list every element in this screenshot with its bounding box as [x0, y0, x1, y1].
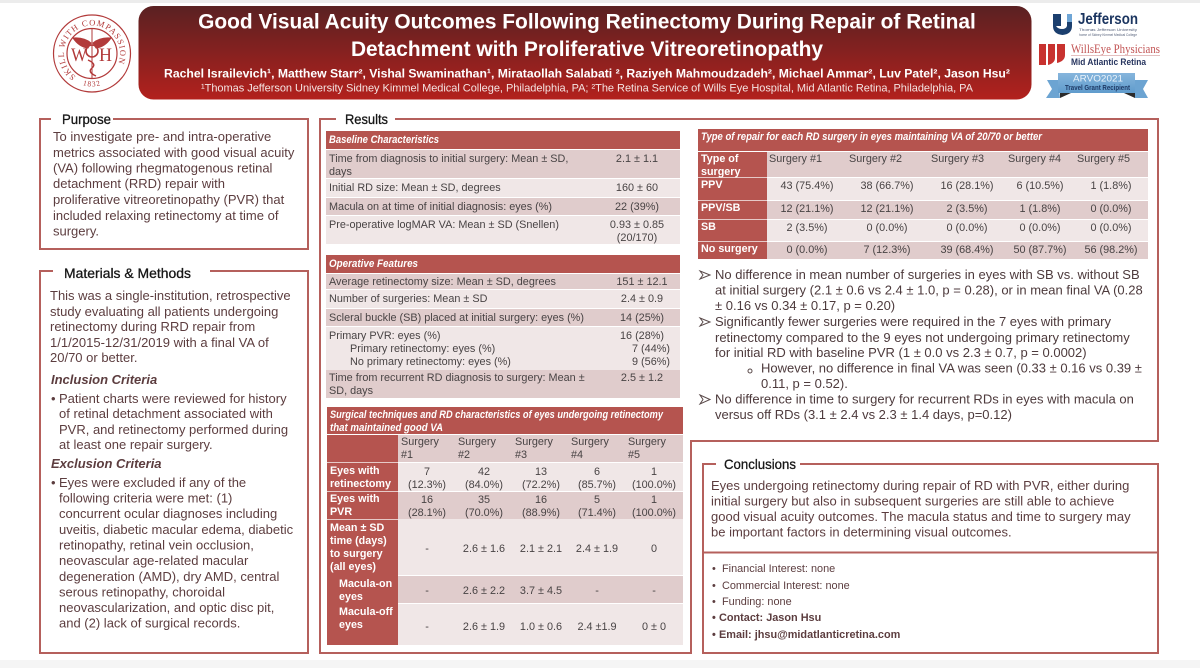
table: surgical techniques: (71.4%) — [578, 507, 616, 519]
table: baseline characteristics: 22 (39%) — [615, 201, 659, 213]
table: baseline characteristics — [326, 131, 680, 244]
table: operative features: Number of surgeries: Mean ± SD — [329, 293, 488, 305]
affiliations: ¹Thomas Jefferson University Sidney Kimmel Medical College, Philadelphia, PA; ²The Retina Service of Wills Eye Hospital, Mid Atlantic Retina, Philadelphia, PA — [201, 82, 974, 94]
table: type of repair: 43 (75.4%) — [780, 180, 834, 192]
table: surgical techniques: 13 — [535, 466, 547, 478]
disclosures: • — [712, 629, 716, 641]
table: baseline characteristics: days — [329, 166, 352, 178]
conclusions text: be important factors in determining visual outcomes. — [711, 524, 1012, 540]
table: baseline characteristics: 160 ± 60 — [616, 182, 658, 194]
logo: college seal: 1832 — [83, 80, 100, 86]
table: surgical techniques: 0 — [651, 543, 657, 555]
table: type of repair: 0 (0.0%) — [947, 222, 987, 234]
table: surgical techniques: #4 — [571, 449, 583, 461]
panel: conclusions — [703, 456, 1158, 653]
table: surgical techniques: Surgery — [515, 436, 554, 448]
logo: Jefferson: Jefferson — [1078, 11, 1138, 28]
table: surgical techniques: 35 — [478, 494, 490, 506]
table: type of repair: 1 (1.8%) — [1091, 180, 1131, 192]
table: surgical techniques: Macula-on — [339, 578, 392, 590]
table: surgical techniques: Eyes with — [330, 465, 380, 477]
results findings list: ± 0.16 vs 0.34 ± 0.17, p = 0.20) — [715, 298, 895, 313]
table: baseline characteristics: 0.93 ± 0.85 — [610, 219, 664, 231]
methods text: study evaluating all patients undergoing — [50, 304, 278, 319]
table: surgical techniques: 42 — [478, 466, 490, 478]
table: surgical techniques: PVR — [330, 506, 352, 518]
table: operative features: 2.4 ± 0.9 — [621, 293, 663, 305]
panel: purpose — [40, 111, 308, 249]
title: Detachment with Proliferative Vitreoretinopathy — [351, 38, 823, 61]
table: operative features: Primary PVR: eyes (%) — [329, 330, 440, 342]
table: type of repair: surgery — [701, 166, 740, 178]
table: baseline characteristics: Time from diagnosis to initial surgery: Mean ± SD, — [329, 153, 568, 165]
table: type of repair: 12 (21.1%) — [780, 203, 834, 215]
panel: results — [320, 111, 1158, 653]
authors: Rachel Israilevich¹, Matthew Starr², Vishal Swaminathan¹, Mirataollah Salabati ², Raziyeh Mahmoudzadeh², Michael Ammar², Luv Patel², Jason Hsu² — [164, 66, 1010, 80]
exclusion criteria: Eyes were excluded if any of the — [59, 475, 246, 490]
table: type of repair: 0 (0.0%) — [1020, 222, 1060, 234]
table: surgical techniques: (72.2%) — [522, 479, 560, 491]
exclusion criteria: neovascularization, and optic disc pit, — [59, 600, 274, 615]
results findings list: No difference in mean number of surgeries in eyes with SB vs. without SB — [715, 267, 1140, 282]
badge: ARVO travel grant: ARVO2021 — [1073, 74, 1123, 84]
table: operative features: 151 ± 12.1 — [616, 276, 668, 288]
table: baseline characteristics: Initial RD size: Mean ± SD, degrees — [329, 182, 501, 194]
table: surgical techniques: Surgical techniques and RD characteristics of eyes undergoing retinectomy — [330, 409, 664, 421]
table: type of repair: 12 (21.1%) — [860, 203, 914, 215]
heading: conclusions: Conclusions — [724, 456, 796, 472]
table: surgical techniques: (all eyes) — [330, 561, 376, 573]
table: operative features: Operative Features — [329, 258, 418, 270]
conclusions text: initial surgery but also in subsequent surgeries are still able to achieve — [711, 494, 1114, 508]
logo: college seal: W — [71, 45, 87, 66]
table: type of repair: Surgery #2 — [849, 153, 902, 165]
table: surgical techniques: (28.1%) — [408, 507, 446, 519]
table: operative features: 2.5 ± 1.2 — [621, 372, 663, 384]
exclusion criteria — [51, 456, 294, 630]
table: type of repair: 0 (0.0%) — [1091, 222, 1131, 234]
table: surgical techniques: 7 — [424, 466, 430, 478]
table: surgical techniques: to surgery — [330, 548, 383, 560]
inclusion criteria: at least one repair surgery. — [59, 437, 213, 452]
table: surgical techniques: 2.1 ± 2.1 — [520, 543, 562, 555]
table: type of repair: 2 (3.5%) — [787, 222, 827, 234]
methods text: 1/1/2015-12/31/2019 with a final VA of — [50, 335, 269, 350]
inclusion criteria: Patient charts were reviewed for history — [59, 391, 287, 406]
table: surgical techniques — [327, 407, 683, 645]
table: baseline characteristics: (20/170) — [617, 232, 657, 244]
results findings list — [700, 267, 1143, 422]
table: type of repair: 0 (0.0%) — [787, 244, 827, 256]
inclusion criteria: Inclusion Criteria — [51, 372, 157, 387]
table: type of repair: 50 (87.7%) — [1013, 244, 1067, 256]
results findings list: for initial RD with baseline PVR (1 ± 0.0 vs 2.3 ± 0.7, p = 0.0002) — [715, 345, 1087, 360]
results findings list: However, no difference in final VA was seen (0.33 ± 0.16 vs 0.39 ± — [761, 360, 1142, 376]
table: surgical techniques: that maintained good VA — [330, 422, 443, 434]
inclusion criteria — [51, 372, 288, 452]
purpose text: surgery. — [53, 224, 99, 238]
table: surgical techniques: - — [652, 585, 656, 597]
table: surgical techniques: 1 — [651, 494, 657, 506]
inclusion criteria: PVR, and retinectomy performed during — [59, 422, 288, 437]
title: Good Visual Acuity Outcomes Following Retinectomy During Repair of Retinal — [198, 11, 976, 34]
table: surgical techniques: (12.3%) — [408, 479, 446, 491]
table: surgical techniques: Surgery — [628, 436, 667, 448]
table: baseline characteristics: 2.1 ± 1.1 — [616, 153, 658, 165]
badge: ARVO travel grant: Travel Grant Recipient — [1065, 85, 1131, 92]
logo: Wills Eye Physicians: WillsEye Physicians — [1071, 42, 1160, 56]
exclusion criteria: Exclusion Criteria — [51, 456, 162, 471]
table: type of repair: Type of repair for each RD surgery in eyes maintaining VA of 20/70 or better — [701, 131, 1043, 143]
table: surgical techniques: 0 ± 0 — [642, 621, 666, 633]
table: baseline characteristics: Baseline Characteristics — [329, 134, 439, 146]
table: surgical techniques: #1 — [401, 449, 413, 461]
table: surgical techniques: Surgery — [458, 436, 497, 448]
table: surgical techniques: Surgery — [571, 436, 610, 448]
methods text: retinectomy during RRD repair from — [50, 319, 255, 334]
badge: ARVO travel grant — [1046, 73, 1148, 98]
disclosures: Funding: none — [722, 596, 792, 608]
table: surgical techniques: eyes — [339, 619, 363, 631]
table: surgical techniques: 5 — [594, 494, 600, 506]
table: type of repair: Surgery #3 — [931, 153, 984, 165]
table: type of repair: Surgery #5 — [1077, 153, 1130, 165]
methods text — [50, 288, 291, 365]
table: type of repair — [698, 129, 1148, 259]
table: surgical techniques: (100.0%) — [632, 507, 676, 519]
table: surgical techniques: #2 — [458, 449, 470, 461]
table: surgical techniques: Eyes with — [330, 493, 380, 505]
methods text: 20/70 or better. — [50, 350, 137, 365]
table: operative features — [326, 255, 680, 398]
heading: materials and methods: Materials & Methods — [64, 265, 191, 281]
table: type of repair: PPV — [701, 179, 723, 191]
purpose text: proliferative vitreoretinopathy (PVR) that — [53, 192, 285, 207]
table: surgical techniques: (88.9%) — [522, 507, 560, 519]
table: surgical techniques: (85.7%) — [578, 479, 616, 491]
exclusion criteria: degeneration (AMD), dry AMD, central — [59, 569, 279, 584]
exclusion criteria: uveitis, diabetic macular edema, diabetic — [59, 522, 294, 537]
table: surgical techniques: Surgery — [401, 436, 440, 448]
table: operative features: No primary retinectomy: eyes (%) — [350, 356, 511, 368]
exclusion criteria: retinopathy, retinal vein occlusion, — [59, 538, 254, 552]
table: surgical techniques: - — [425, 585, 429, 597]
table: surgical techniques: 1 — [651, 466, 657, 478]
table: type of repair: Surgery #1 — [769, 153, 822, 165]
logo: Wills Eye Physicians: Mid Atlantic Retina — [1071, 56, 1147, 67]
logo: college seal: SKILL WITH COMPASSION — [58, 20, 126, 80]
purpose text: To investigate pre- and intra-operative — [53, 129, 271, 144]
results findings list: No difference in time to surgery for recurrent RDs in eyes with macula on — [715, 392, 1134, 406]
table: surgical techniques: - — [425, 621, 429, 633]
table: type of repair: 39 (68.4%) — [940, 244, 994, 256]
logo: Jefferson: home of Sidney Kimmel Medical College — [1079, 33, 1137, 37]
results findings list: versus off RDs (3.1 ± 2.4 vs 2.3 ± 1.4 days, p=0.12) — [715, 407, 1012, 422]
table: operative features: 9 (56%) — [632, 356, 670, 368]
heading: results: Results — [345, 111, 388, 127]
table: operative features: 14 (25%) — [620, 312, 664, 324]
disclosures — [712, 563, 901, 641]
results findings list: Significantly fewer surgeries were required in the 7 eyes with primary — [715, 314, 1111, 329]
table: operative features: 7 (44%) — [632, 343, 670, 355]
results findings list: at initial surgery (2.1 ± 0.6 vs 2.4 ± 1.0, p = 0.28), or in mean final VA (0.28 — [715, 282, 1143, 298]
results findings list: 0.11, p = 0.52). — [761, 376, 848, 391]
exclusion criteria: neovascular age-related macular — [59, 553, 249, 568]
disclosures: Email: jhsu@midatlanticretina.com — [719, 629, 901, 641]
table: surgical techniques: 2.4 ±1.9 — [577, 621, 617, 633]
table: surgical techniques: #3 — [515, 449, 527, 461]
table: operative features: Average retinectomy size: Mean ± SD, degrees — [329, 276, 557, 288]
logo: Jefferson — [1053, 11, 1138, 37]
table: type of repair: 6 (10.5%) — [1016, 180, 1064, 192]
inclusion criteria: of retinal detachment associated with — [59, 406, 273, 421]
methods text: This was a single-institution, retrospective — [50, 288, 291, 303]
table: type of repair: SB — [701, 221, 716, 233]
panel: materials and methods — [40, 265, 308, 653]
title — [198, 11, 976, 61]
exclusion criteria: concurrent ocular diagnoses including — [59, 506, 277, 521]
table: type of repair: 1 (1.8%) — [1020, 203, 1060, 215]
table: surgical techniques: (70.0%) — [465, 507, 503, 519]
table: surgical techniques: 16 — [535, 494, 547, 506]
table: type of repair: 16 (28.1%) — [940, 180, 994, 192]
inclusion criteria: • — [51, 391, 56, 406]
conclusions text: good visual acuity outcomes. The macula status and time to surgery may — [711, 509, 1131, 524]
table: surgical techniques: retinectomy — [330, 478, 391, 490]
table: surgical techniques: 6 — [594, 466, 600, 478]
table: surgical techniques: - — [425, 543, 429, 555]
table: operative features: SD, days — [329, 385, 374, 397]
table: surgical techniques: 1.0 ± 0.6 — [520, 621, 562, 633]
logo: college seal: H — [99, 45, 112, 66]
table: type of repair: Surgery #4 — [1008, 153, 1061, 165]
table: operative features: 16 (28%) — [620, 330, 664, 342]
table: type of repair: 7 (12.3%) — [863, 244, 911, 256]
table: surgical techniques: #5 — [628, 449, 640, 461]
table: type of repair: PPV/SB — [701, 202, 741, 214]
table: operative features: Time from recurrent RD diagnosis to surgery: Mean ± — [329, 372, 585, 384]
table: operative features: Primary retinectomy: eyes (%) — [350, 343, 495, 355]
table: surgical techniques: 16 — [421, 494, 433, 506]
table: type of repair: 2 (3.5%) — [947, 203, 987, 215]
disclosures: Financial Interest: none — [722, 563, 835, 575]
exclusion criteria: and (2) lack of surgical records. — [59, 616, 240, 630]
table: baseline characteristics: Pre-operative logMAR VA: Mean ± SD (Snellen) — [329, 219, 559, 231]
table: surgical techniques: time (days) — [330, 535, 387, 547]
purpose text: (VA) following rhegmatogenous retinal — [53, 160, 273, 176]
table: type of repair: 38 (66.7%) — [860, 180, 914, 192]
table: type of repair: Type of — [701, 153, 739, 165]
results findings list: retinectomy compared to the 9 eyes not undergoing primary retinectomy — [715, 330, 1130, 345]
purpose text — [53, 129, 295, 238]
logo: Jefferson: Thomas Jefferson University — [1079, 27, 1137, 32]
table: surgical techniques: - — [595, 585, 599, 597]
disclosures: Commercial Interest: none — [722, 580, 850, 592]
table: type of repair: 56 (98.2%) — [1084, 244, 1138, 256]
exclusion criteria: following criteria were met: (1) — [59, 490, 232, 506]
table: baseline characteristics: Macula on at time of initial diagnosis: eyes (%) — [329, 201, 552, 213]
logo: Wills Eye Physicians — [1039, 42, 1160, 67]
purpose text: metrics associated with good visual acuity — [53, 145, 295, 160]
table: surgical techniques: 3.7 ± 4.5 — [520, 585, 562, 597]
disclosures: • — [712, 563, 716, 575]
table: surgical techniques: Mean ± SD — [330, 522, 385, 534]
title banner — [138, 6, 1032, 100]
disclosures: • — [712, 580, 716, 592]
table: surgical techniques: (84.0%) — [465, 479, 503, 491]
exclusion criteria: • — [51, 475, 56, 490]
disclosures: • — [712, 612, 716, 624]
purpose text: detachment (RRD) repair with — [53, 176, 225, 191]
disclosures: Contact: Jason Hsu — [719, 612, 821, 624]
conclusions text — [711, 478, 1131, 540]
exclusion criteria: serous retinopathy, choroidal — [59, 584, 225, 600]
purpose text: included relaxing retinectomy at time of — [53, 208, 279, 223]
table: surgical techniques: 2.4 ± 1.9 — [576, 543, 618, 555]
table: surgical techniques: (100.0%) — [632, 479, 676, 491]
table: type of repair: No surgery — [701, 243, 758, 255]
table: surgical techniques: 2.6 ± 1.6 — [463, 543, 505, 555]
heading: purpose: Purpose — [62, 111, 111, 127]
table: surgical techniques: 2.6 ± 1.9 — [463, 621, 505, 633]
table: surgical techniques: Macula-off — [339, 606, 393, 618]
disclosures: • — [712, 596, 716, 608]
table: type of repair: 0 (0.0%) — [1091, 203, 1131, 215]
table: type of repair: 0 (0.0%) — [867, 222, 907, 234]
table: surgical techniques: eyes — [339, 591, 363, 603]
table: surgical techniques: 2.6 ± 2.2 — [463, 585, 505, 597]
conclusions text: Eyes undergoing retinectomy during repair of RD with PVR, either during — [711, 478, 1129, 493]
table: operative features: Scleral buckle (SB) placed at initial surgery: eyes (%) — [329, 312, 584, 324]
